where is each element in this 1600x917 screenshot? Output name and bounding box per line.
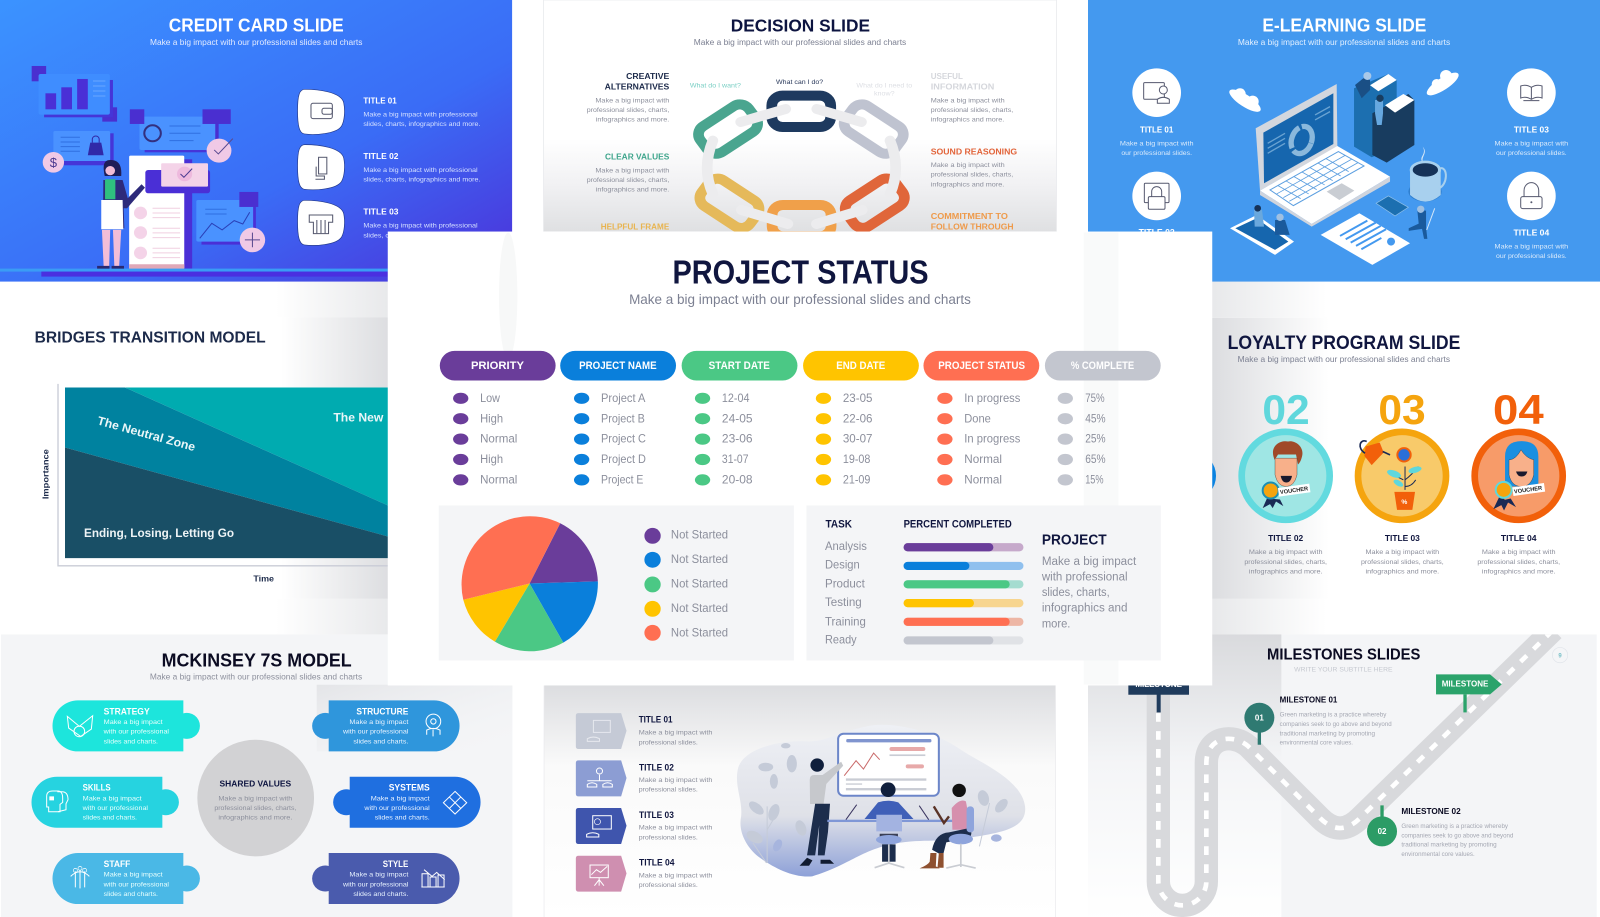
subtitle: project status: Make a big impact with our professional slides and charts [629,292,971,308]
table column: priority [453,391,517,486]
text: title 01: Make a big impact with professional [363,111,478,118]
text: sound reasoning: Make a big impact with [931,162,1005,169]
subtitle: credit card slide: Make a big impact with our professional slides and charts [150,37,362,47]
text: title 02 [363,151,481,184]
table column: project status: In progress [964,391,1020,405]
loyalty item 04: infographics and more. [1482,568,1556,575]
table header pills [440,351,1161,380]
circle: shared values: Make a big impact with [218,795,293,802]
label: what do I want: What do I want? [690,83,741,90]
pill: systems [333,777,481,828]
text: project note: more. [1042,616,1070,630]
loyalty item 02: TITLE 02 [1268,533,1303,543]
text: creative alternatives: CREATIVE [626,71,669,81]
icon block: title 01: Make a big impact with [1120,140,1194,147]
marker: 02: 02 [1378,827,1387,836]
task labels: Analysis [825,539,867,553]
text: sound reasoning: professional slides, charts, [931,172,1013,179]
progress bars [904,543,1023,645]
text: clear values: infographics and more. [596,187,669,194]
loyalty item 04: Make a big impact with [1482,549,1556,556]
text: useful information: INFORMATION [931,82,994,92]
page number badge: 9 [1558,653,1562,659]
item: title 03: professional slides. [639,834,698,841]
table column: priority: Normal [480,472,517,486]
item: title 04: TITLE 04 [639,858,675,868]
table column: end date: 30-07 [843,432,873,446]
pill: style [312,853,460,904]
loyalty item 04: 04 [1493,386,1544,433]
text: milestone 01: traditional marketing by promoting [1280,730,1376,737]
chart: decision chain [690,79,912,236]
item: title 01: Make a big impact with [639,730,713,737]
pill: structure: STRUCTURE [356,706,408,716]
text: helpful frame: HELPFUL FRAME [601,222,669,232]
item: title 01: professional slides. [639,739,698,746]
pill: strategy: STRATEGY [104,706,150,716]
sign: green milestone [1436,674,1502,712]
task labels: Design [825,558,860,572]
item: title 02: professional slides. [639,787,698,794]
loyalty item 03: infographics and more. [1366,568,1439,575]
column heads [826,518,1012,530]
text: project note: with professional [1041,570,1128,584]
heading: decision slide: DECISION SLIDE [731,15,870,36]
circle: shared values: professional slides, charts, [214,805,297,812]
table column: project status: Normal [964,452,1002,466]
table header pills: PRIORITY [471,360,524,372]
panel: task progress [806,505,1161,660]
icon block: title 04: TITLE 04 [1514,228,1549,238]
text: title 02: TITLE 02 [363,151,399,161]
icon block: title 04: our professional slides. [1496,253,1567,260]
text: project note: slides, charts, [1042,585,1110,599]
icon block: title 04 [1495,172,1569,260]
icon block: title 02: TITLE 02 [1139,227,1175,237]
panel: decision slide [544,0,1056,236]
heading: project status: PROJECT STATUS [672,255,929,292]
task labels: Training [825,614,866,628]
text: title 03: TITLE 03 [363,207,399,217]
icon block: title 01: our professional slides. [1121,150,1192,157]
text: milestone 02 [1401,806,1514,858]
illustration: woman presenting finance cards [0,66,388,277]
pill: strategy: with our professional [103,729,170,736]
text: useful information: infographics and more. [931,117,1004,124]
task labels: Testing [825,595,862,609]
text: creative alternatives: Make a big impact with [595,97,669,104]
heading: milestones slides: MILESTONES SLIDES [1267,647,1421,664]
table column: start date: 12-04 [722,391,750,405]
legend: Not Started [671,553,728,566]
loyalty item 02: Make a big impact with [1249,549,1323,556]
pill: skills [32,777,179,828]
text: milestone 02: Green marketing is a practice whereby [1401,823,1509,830]
table column: percent complete: 45% [1085,411,1106,425]
pie chart [462,516,598,651]
loyalty item 04 [1475,386,1563,575]
pill: structure: with our professional [342,729,409,736]
column heads: PERCENT COMPLETED [904,518,1012,530]
text: clear values: professional slides, charts, [587,177,669,184]
table column: end date: 21-09 [843,472,871,486]
panel: milestones slides [1088,630,1597,917]
table column: end date: 23-05 [843,391,873,405]
text: sound reasoning: infographics and more. [931,181,1004,188]
text: milestone 01: environmental core values. [1280,740,1353,747]
axis label: importance: Importance [41,449,50,499]
text: milestone 01: MILESTONE 01 [1280,695,1338,705]
pill: staff: with our professional [103,881,170,888]
panel: mckinsey 7s model [1,634,512,917]
loyalty item 03: Make a big impact with [1366,549,1440,556]
loyalty item 03: 03 [1378,386,1426,433]
item: title 04: Make a big impact with [639,872,713,879]
text: commitment to follow through: COMMITMENT TO [931,211,1008,221]
panel: loyalty program slide [1177,318,1600,599]
text: creative alternatives: ALTERNATIVES [605,82,669,92]
icon block: title 01: TITLE 01 [1140,124,1174,134]
page number badge [1552,647,1568,663]
circle: shared values [197,740,314,856]
text: commitment to follow through: FOLLOW THROUGH [931,222,1014,232]
table column: priority: High [480,452,503,466]
table header pills: PROJECT STATUS [938,360,1025,372]
item: title 03 [576,808,713,844]
panel: credit card slide [0,0,512,282]
road: winding route [1158,630,1553,905]
marker: 01 [1244,703,1274,745]
table column: priority: High [480,411,503,425]
table column: start date: 31-07 [722,452,749,466]
loyalty item 02 [1242,386,1330,575]
table column: percent complete: 15% [1085,472,1104,486]
loyalty item 02: 02 [1262,386,1310,433]
text: project note: Make a big impact [1042,554,1137,568]
legend: Not Started [671,578,728,591]
loyalty item 03: TITLE 03 [1385,533,1420,543]
pill: staff [53,853,200,904]
subtitle: e-learning slide: Make a big impact with our professional slides and charts [1238,37,1450,47]
illustration: woman presenting finance cards: $ [50,155,57,170]
heading: credit card slide: CREDIT CARD SLIDE [169,16,344,37]
text: milestone 01: companies seek to go above and beyond [1280,721,1392,728]
text: milestone 02: traditional marketing by promoting [1401,842,1497,849]
table column: percent complete: 25% [1085,432,1106,446]
item: title 02: Make a big impact with [639,777,713,784]
icon block: title 01 [1120,68,1194,157]
loyalty item 04: professional slides, charts, [1477,559,1560,566]
circle: shared values: SHARED VALUES [220,779,291,789]
loyalty item 04: VOUCHER [1514,486,1543,496]
table column: end date: 22-06 [843,411,873,425]
table header pills: % COMPLETE [1071,360,1135,372]
text: milestone 01 [1280,695,1392,747]
subtitle: loyalty program slide: Make a big impact with our professional slides and charts [1238,354,1450,364]
item: title 01 [576,713,713,749]
panel: project status card [388,232,1212,685]
item: title 04 [576,856,713,892]
table column: project name [574,391,646,486]
loyalty item 03: professional slides, charts, [1361,559,1444,566]
table column: project status [937,391,1020,486]
chart: decision chain: know? [874,91,895,98]
table column: project name: Project A [601,391,646,405]
table column: end date: 19-08 [843,452,871,466]
text: project note [1041,533,1137,630]
loyalty item 02: infographics and more. [1249,568,1323,575]
item: title 03: Make a big impact with [639,825,713,832]
pill: style: slides and charts. [353,891,409,898]
pill: skills: SKILLS [83,783,111,793]
loyalty item 02: VOUCHER [1280,486,1309,496]
panel: team presentation slide [544,685,1055,917]
table column: priority: Normal [480,432,517,446]
pill: strategy: slides and charts. [104,738,158,745]
text: useful information: professional slides, charts, [931,107,1013,114]
chart: transition areas [41,384,390,583]
subtitle: milestones slides: WRITE YOUR SUBTITLE HERE [1294,667,1393,673]
pill: style: Make a big impact [349,872,409,879]
pill: strategy: Make a big impact [104,719,163,726]
table column: project name: Project D [601,452,646,466]
pill: structure [312,700,460,751]
text: title 03: slides, charts, infographics and more. [363,232,481,239]
column heads: TASK [826,518,852,530]
pill: skills: slides and charts. [83,815,137,822]
legend [644,528,728,641]
table header pills: START DATE [709,360,770,372]
table column: priority: Low [480,391,500,405]
text: creative alternatives [587,71,669,124]
item: title 03: TITLE 03 [639,810,674,820]
text: useful information [931,71,1013,124]
text: project note: PROJECT [1042,533,1107,549]
text: useful information: Make a big impact with [931,97,1005,104]
table column: project status: Normal [964,472,1002,486]
icon block: title 03: TITLE 03 [1514,124,1549,134]
task labels: Product [825,577,865,591]
table column: project name: Project C [601,432,646,446]
axis label: time: Time [253,574,275,583]
icon: wallet badge [298,89,345,134]
pill: strategy [53,700,200,751]
table column: percent complete: 75% [1085,391,1105,405]
table column: project name: Project E [601,472,643,486]
text: title 02: slides, charts, infographics and more. [363,177,481,184]
label: ending losing letting go: Ending, Losing, Letting Go [84,526,234,540]
icon: ATM slot badge [298,200,345,245]
table column: start date: 20-08 [722,472,753,486]
subtitle: decision slide: Make a big impact with our professional slides and charts [694,37,906,47]
circle: shared values: infographics and more. [218,815,293,822]
table header pills: PROJECT NAME [579,360,657,372]
table column: project status: Done [964,411,991,425]
table column: percent complete [1058,391,1106,486]
pill: staff: slides and charts. [104,891,158,898]
text: title 02: Make a big impact with professional [363,167,478,174]
table column: project status: In progress [964,432,1020,446]
heading: e-learning slide: E-LEARNING SLIDE [1262,15,1426,36]
text: sound reasoning: SOUND REASONING [931,147,1017,156]
text: milestone 02: companies seek to go above and beyond [1401,832,1514,839]
table column: project name: Project B [601,411,645,425]
text: creative alternatives: infographics and more. [596,117,669,124]
item: title 02 [576,760,713,796]
pill: style: STYLE [383,859,408,869]
icon block: title 02 [1132,172,1181,237]
legend: Not Started [671,602,728,615]
item: title 01: TITLE 01 [639,715,673,725]
label: what can I do: What can I do? [776,79,823,86]
icon block: title 03: Make a big impact with [1495,140,1569,147]
text: commitment to follow through [931,211,1014,232]
icon: card in hand badge [298,145,345,190]
icon block: title 03: our professional slides. [1496,150,1567,157]
table header pills: END DATE [836,360,886,372]
table column: percent complete: 65% [1085,452,1106,466]
loyalty item 02: professional slides, charts, [1244,559,1327,566]
text: clear values: CLEAR VALUES [605,152,669,162]
panel: bridges transition model [0,317,390,599]
pill: skills: with our professional [82,805,149,812]
panel: pie chart and legend [439,505,794,660]
pill: systems: SYSTEMS [389,783,430,793]
icon block: title 04: Make a big impact with [1495,244,1569,251]
text: clear values [587,152,669,194]
text: title 01: TITLE 01 [363,95,397,105]
text: milestone 02: MILESTONE 02 [1401,806,1461,816]
label: the neutral zone: The Neutral Zone [96,414,197,454]
loyalty item 04: TITLE 04 [1501,533,1537,543]
pill: systems: with our professional [363,805,430,812]
pill: staff: Make a big impact [104,872,163,879]
table column: start date: 23-06 [722,432,753,446]
label: the new: The New [333,411,384,425]
legend: Not Started [671,529,728,542]
icon block: title 03 [1495,68,1569,157]
pill: systems: slides and charts. [375,815,430,822]
text: milestone 01: Green marketing is a practice whereby [1280,712,1387,719]
sign: dark milestone [1128,678,1189,712]
pill: structure: Make a big impact [349,719,409,726]
heading: loyalty program slide: LOYALTY PROGRAM SLIDE [1228,333,1460,354]
table column: start date [695,391,753,486]
pill: style: with our professional [342,881,409,888]
marker: 01: 01 [1255,713,1264,722]
label: what do I need to know: What do I need to [856,83,912,90]
text: sound reasoning [931,147,1017,188]
heading: mckinsey 7s model: MCKINSEY 7S MODEL [162,649,352,670]
partial circle: voucher 01 [1177,454,1216,498]
heading: bridges transition model: BRIDGES TRANSITION MODEL [35,330,266,347]
text: project note: infographics and [1042,601,1128,615]
legend: Not Started [671,626,728,639]
item: title 04: professional slides. [639,882,698,889]
pill: structure: slides and charts. [353,738,409,745]
pill: systems: Make a big impact [371,795,430,802]
text: clear values: Make a big impact with [595,167,669,174]
marker: 02 [1367,805,1397,846]
text: milestone 02: environmental core values. [1401,851,1475,858]
text: creative alternatives: professional slides, charts, [587,107,669,114]
text: useful information: USEFUL [931,71,963,81]
task labels [825,539,867,647]
panel: e-learning slide [1088,0,1600,282]
loyalty item 03: % [1401,499,1407,506]
pill: staff: STAFF [104,859,131,869]
sign: green milestone: MILESTONE [1442,679,1489,689]
text: title 03: Make a big impact with professional [363,223,478,230]
subtitle: mckinsey 7s model: Make a big impact with our professional slides and charts [150,672,362,682]
table column: start date: 24-05 [722,411,753,425]
sign: dark milestone: MILESTONE [1135,679,1182,689]
text: title 01 [363,95,481,128]
text: title 03 [363,207,481,239]
item: title 02: TITLE 02 [639,762,674,772]
loyalty item 03 [1358,386,1446,575]
pill: skills: Make a big impact [83,795,142,802]
illustration: isometric laptop and books [1226,69,1462,265]
task labels: Ready [825,633,857,647]
illustration: team meeting [737,725,1025,877]
text: title 01: slides, charts, infographics and more. [363,121,481,128]
table column: end date [816,391,873,486]
